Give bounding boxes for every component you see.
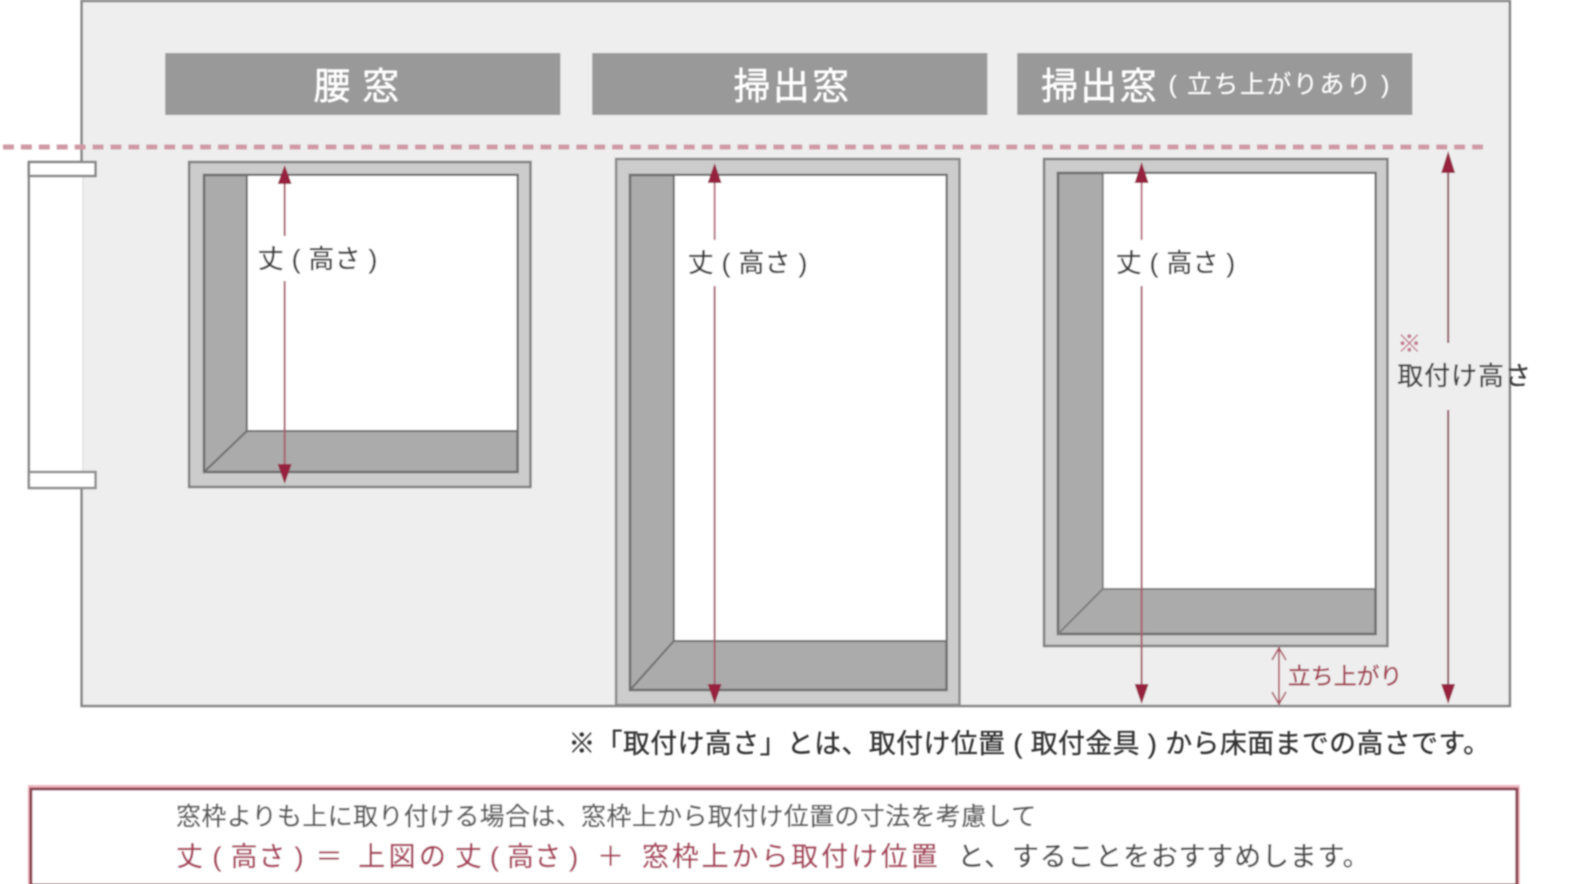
window: 腰窓 <box>189 162 530 487</box>
label: 取付け高さ: 取付け高さ <box>1397 362 1531 391</box>
heading: 腰窓 <box>165 53 560 115</box>
heading: 掃出窓（立ち上がりあり）: ( 立ち上がりあり ) <box>1168 71 1389 99</box>
label: 掃出窓 丈（高さ）: 丈 ( 高さ ) <box>688 249 807 278</box>
callout formula: ＝ <box>316 842 342 872</box>
heading: 掃出窓（立ち上がりあり）: 掃出窓 <box>1041 66 1157 107</box>
callout: recommendation box <box>31 788 1517 884</box>
mounting height dashed line <box>3 144 1487 150</box>
label: 立ち上がりあり 丈（高さ）: 丈 ( 高さ ) <box>1116 249 1235 278</box>
label: 立ち上がり: 立ち上がり <box>1288 663 1402 689</box>
panel: wall background <box>82 1 1510 706</box>
label: 腰窓 丈（高さ）: 丈 ( 高さ ) <box>258 245 377 274</box>
callout line 1: 窓枠よりも上に取り付ける場合は、窓枠上から取付け位置の寸法を考慮して <box>176 803 1036 831</box>
arrow: 腰窓 height <box>278 165 292 484</box>
heading: 掃出窓 <box>592 53 987 115</box>
arrow: rise height <box>1272 648 1286 704</box>
arrow: 掃出窓（立ち上がりあり） height <box>1135 162 1149 704</box>
callout formula: 丈 ( 高さ ) <box>455 842 578 872</box>
callout formula: 上図の <box>358 842 446 872</box>
footnote: ※「取付け高さ」とは、取付け位置 ( 取付金具 ) から床面までの高さです。 <box>568 729 1490 759</box>
arrow: mounting height <box>1441 151 1455 704</box>
callout line 2 ending: と、することをおすすめします。 <box>957 842 1370 872</box>
callout formula: ＋ <box>597 842 624 872</box>
panel: curtain rail <box>28 162 96 488</box>
heading: 掃出窓（立ち上がりあり） <box>1017 53 1412 115</box>
heading: 掃出窓: 掃出窓 <box>734 66 849 107</box>
arrow: 掃出窓 height <box>708 163 722 704</box>
heading: 腰窓: 腰窓 <box>314 66 399 107</box>
window: 掃出窓（立ち上がりあり） <box>1044 159 1387 646</box>
window: 掃出窓 <box>616 159 959 705</box>
callout formula: 丈 ( 高さ ) <box>176 842 304 872</box>
callout formula: 窓枠上から取付け位置 <box>642 842 938 872</box>
label: note mark: ※ <box>1397 331 1421 358</box>
